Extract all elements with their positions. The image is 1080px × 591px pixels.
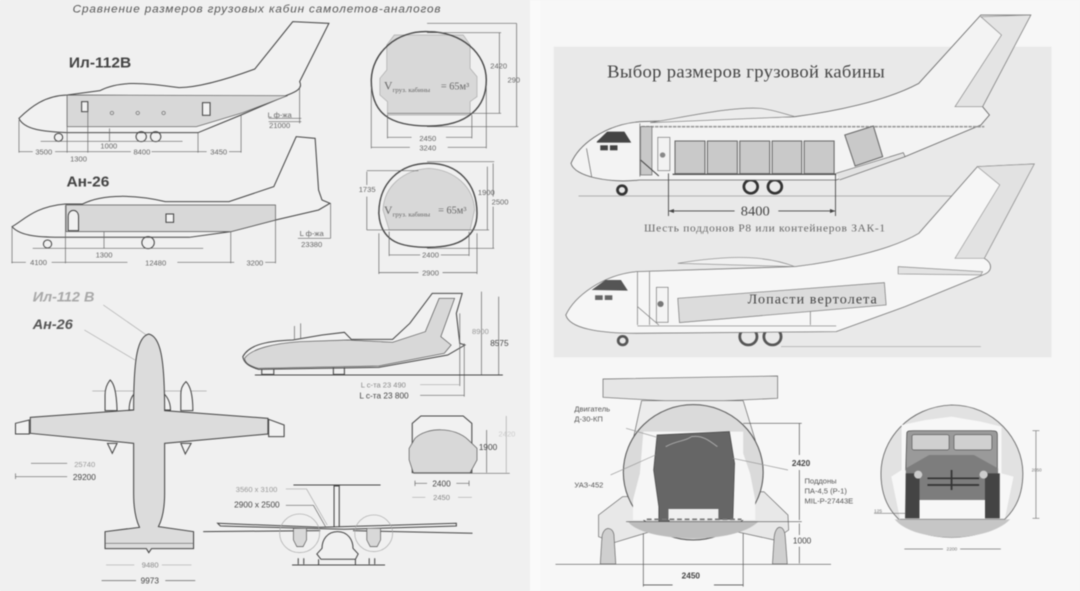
cross-section: Il-112V cabin: V	[384, 80, 393, 92]
cross-section: Il-112V cabin: 2420	[490, 61, 507, 70]
section: UAZ-452 and pallets: 1000	[793, 537, 812, 546]
front section: overlaid cabin: 1900	[479, 443, 498, 452]
section: UAZ-452 and pallets: ПА-4,5 (Р-1)	[804, 486, 847, 495]
heading: Il-112V: Ил-112В	[69, 55, 131, 71]
cross-section: An-26 cabin: V	[384, 205, 393, 217]
plan view: aircraft from above: 9973	[141, 577, 159, 586]
section: UAZ-452 and pallets: Двигатель	[574, 405, 610, 414]
plan view: aircraft from above: 25740	[74, 460, 95, 469]
cross-section: An-26 cabin: 2400	[422, 251, 439, 260]
side view: An-26: 4100	[30, 258, 47, 267]
heading: An-26: Ан-26	[66, 174, 109, 191]
cross-section: Il-112V cabin: = 65м³	[441, 81, 469, 92]
front section: overlaid cabin: 2450	[433, 493, 450, 502]
label: An-26: Ан-26	[32, 317, 73, 333]
section: vehicle front view: 2200	[947, 547, 958, 553]
side view: Il-112V: 8400	[133, 147, 150, 156]
side view: An-26: 1300	[96, 250, 112, 259]
cross-section: An-26 cabin: 1735	[359, 185, 376, 194]
side view: overlaid profile: L с-та 23 490	[361, 380, 406, 389]
front section: overlaid cabin: 2400	[432, 479, 451, 488]
cross-section: Il-112V cabin: 2450	[419, 134, 436, 143]
cross-section: Il-112V cabin	[371, 23, 520, 152]
cross-section: An-26 cabin: груз. кабины	[393, 212, 431, 219]
front view: aircraft from the front	[203, 485, 473, 565]
section: UAZ-452 and pallets: MIL-P-27443E	[804, 497, 853, 506]
aircraft with helicopter blades	[566, 164, 1034, 347]
section: UAZ-452 and pallets: Поддоны	[804, 476, 837, 485]
cross-section: An-26 cabin: = 65м³	[438, 205, 466, 216]
front view: aircraft from the front: 3560 x 3100	[236, 485, 277, 494]
panel: comparison of side views and cabin sections	[11, 4, 520, 278]
section: UAZ-452 and pallets: 2420	[792, 459, 811, 468]
section: vehicle front view: 125	[874, 508, 882, 514]
section: vehicle front view	[874, 405, 1042, 553]
side view: Il-112V: 3500	[35, 147, 52, 156]
title: cargo cabin comparison: Сравнение размеров грузовых кабин самолетов-аналогов	[73, 4, 440, 16]
dimension: 8400: 8400	[741, 204, 770, 220]
side view: An-26: L ф-жа	[300, 229, 325, 238]
label: helicopter blades: Лопасти вертолета	[748, 293, 877, 308]
side view: An-26: 3200	[246, 258, 263, 267]
side view: Il-112V: 1300	[70, 155, 87, 164]
dimension: 8400	[668, 173, 835, 220]
aircraft with pallets	[571, 15, 1031, 196]
panel: An-26 and Il-112V overlay views	[15, 290, 515, 586]
heading: cargo cabin size: Выбор размеров грузовой кабины	[607, 62, 885, 82]
cross-section: An-26 cabin: 2900	[422, 269, 439, 278]
cross-section: An-26 cabin: 2500	[492, 197, 508, 206]
front view: aircraft from the front: 2900 x 2500	[234, 500, 280, 509]
section: UAZ-452 and pallets: Д-30-КП	[574, 415, 603, 424]
side view: Il-112V: 1000	[100, 142, 117, 151]
front section: overlaid cabin	[409, 416, 515, 502]
cross-section: An-26 cabin	[359, 162, 508, 278]
side view: Il-112V: 21000	[269, 121, 290, 130]
side view: Il-112V: L ф-жа	[268, 110, 293, 119]
side view: An-26: 23380	[301, 240, 322, 249]
plan view: aircraft from above: 29200	[73, 473, 96, 482]
label: Il-112V: Ил-112 В	[33, 290, 94, 306]
cargo pallets	[675, 126, 883, 174]
cross-section: Il-112V cabin: 290	[508, 75, 520, 84]
section: UAZ-452 and pallets: УАЗ-452	[574, 480, 603, 489]
section: UAZ-452 and pallets	[555, 376, 853, 587]
panel: cabin cross-sections with vehicles	[555, 376, 1042, 587]
side view: overlaid profile: 8900	[472, 327, 489, 336]
side view: Il-112V	[19, 22, 329, 164]
cross-section: Il-112V cabin: груз. кабины	[393, 87, 431, 94]
panel: choosing cargo cabin size	[554, 15, 1051, 357]
side view: Il-112V: 3450	[210, 147, 227, 156]
side view: An-26	[11, 137, 331, 268]
side view: An-26: 12480	[145, 259, 166, 268]
section: vehicle front view: 2050	[1032, 468, 1042, 473]
side view: overlaid profile: L с-та 23 800	[359, 391, 409, 400]
cross-section: Il-112V cabin: 3240	[419, 143, 436, 152]
side view: overlaid profile: 8575	[490, 339, 509, 348]
side view: overlaid profile	[243, 292, 509, 400]
caption: pallets or containers: Шесть поддонов Р8 или контейнеров ЗАК-1	[644, 223, 885, 235]
plan view: aircraft from above: 9480	[142, 561, 159, 570]
section: UAZ-452 and pallets: 2450	[682, 571, 701, 580]
cross-section: An-26 cabin: 1900	[478, 188, 495, 197]
background plate	[554, 47, 1051, 357]
plan view: aircraft from above	[15, 305, 284, 586]
front section: overlaid cabin: 2420	[499, 430, 515, 439]
